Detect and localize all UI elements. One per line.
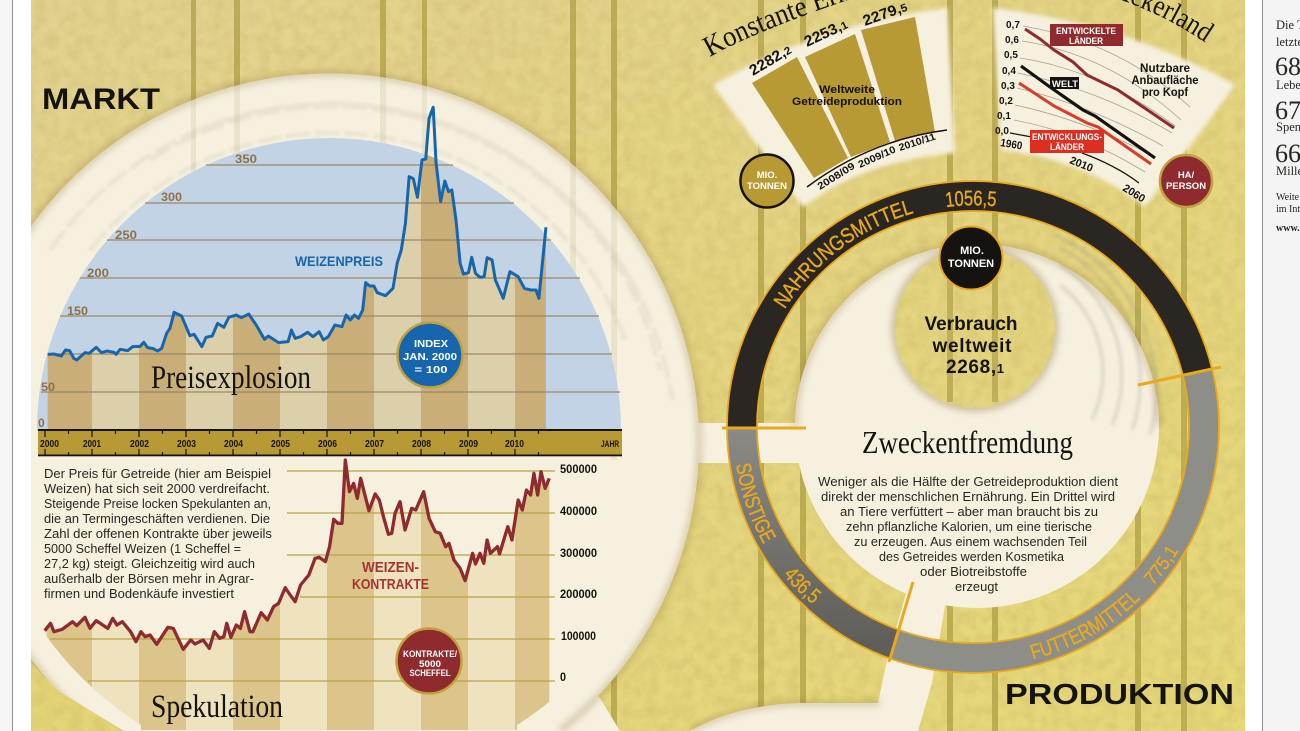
timeline axis: 2001 — [83, 439, 101, 450]
bar axis labels: 2008/09 — [816, 161, 858, 193]
timeline axis: 2004 — [224, 439, 243, 450]
text block: market description: Der Preis für Getreide (hier am Beispiel — [44, 467, 271, 481]
badge: million tonnes gold — [740, 154, 794, 208]
y labels: 0,1 — [997, 111, 1011, 122]
badge: million tonnes gold: TONNEN — [747, 181, 787, 192]
x labels: 2060 — [1120, 182, 1147, 205]
price axis labels: 200 — [87, 266, 109, 280]
badge: hectare per person: PERSON — [1166, 181, 1206, 192]
badge: million tonnes black — [940, 226, 1002, 290]
badge: index: JAN. 2000 — [403, 351, 457, 363]
timeline axis: 2006 — [318, 439, 337, 450]
badge: million tonnes black: TONNEN — [948, 258, 994, 270]
price grid lines — [41, 165, 620, 392]
faint stripes inside circle — [191, 60, 617, 460]
text block: market description: Steigende Preise locken Spekulanten an, — [44, 497, 271, 511]
badge: contracts: SCHEFFEL — [410, 668, 451, 678]
bars — [752, 17, 935, 178]
timeline axis: 2002 — [130, 439, 149, 450]
x labels: 2010 — [1068, 155, 1095, 175]
label: developed countries: LÄNDER — [1069, 36, 1103, 46]
price axis labels: 50 — [41, 380, 55, 394]
chart: grain production bars — [746, 0, 947, 193]
timeline axis: 2007 — [365, 439, 384, 450]
developed countries line — [1025, 29, 1174, 128]
text block: use of grain: an Tiere verfüttert – aber man braucht bis zu — [840, 505, 1098, 519]
sidebar text: Weite — [1276, 192, 1300, 203]
bar axis labels — [816, 132, 937, 193]
timeline axis: 2005 — [271, 439, 290, 450]
text: global consumption: Verbrauch — [924, 314, 1018, 335]
grid curves — [1014, 26, 1190, 172]
contract axis labels: 100000 — [561, 629, 596, 643]
price axis labels: 350 — [235, 152, 257, 166]
price axis labels — [38, 152, 257, 430]
chart: arable land per person — [995, 20, 1198, 205]
timeline axis: 2009 — [459, 439, 478, 450]
badge: million tonnes gold: MIO. — [757, 170, 777, 181]
title: Spekulation: Spekulation — [151, 689, 283, 725]
contract axis labels: 400000 — [560, 504, 597, 518]
heading: Produktion: PRODUKTION — [1005, 679, 1234, 711]
axis line — [1010, 133, 1139, 183]
heading: Markt: MARKT — [42, 83, 160, 116]
badge: index: = 100 — [414, 364, 448, 376]
label: world: WELT — [1052, 79, 1078, 90]
y labels: 0,5 — [1004, 50, 1018, 61]
text block: use of grain: des Getreides werden Kosmetika — [879, 550, 1064, 564]
ring labels: NAHRUNGSMITTEL — [773, 200, 914, 308]
world line — [1021, 66, 1155, 158]
price axis labels: 0 — [38, 416, 45, 430]
title: Preisexplosion: Preisexplosion — [151, 360, 311, 396]
label: developing countries — [1030, 130, 1104, 153]
text block: use of grain: direkt der menschlichen Ernährung. Ein Drittel wird — [821, 490, 1115, 504]
contract grid lines — [50, 471, 555, 681]
title: Zweckentfremdung: Zweckentfremdung — [862, 424, 1073, 460]
bar values: 2282,2 — [746, 41, 794, 79]
y labels: 0,0 — [995, 126, 1009, 137]
badge: hectare per person: HA/ — [1178, 170, 1195, 181]
badge: index — [398, 322, 462, 388]
text block: market description: firmen und Bodenkäufe investiert — [44, 587, 235, 601]
label: Weizenkontrakte — [352, 559, 429, 593]
text block: market description: Zahl der offenen Kontrakte über jeweils — [44, 527, 272, 541]
text block: use of grain: zu erzeugen. Aus einem wachsenden Teil — [854, 535, 1087, 549]
bar axis labels: 2009/10 — [857, 144, 898, 171]
y labels — [995, 20, 1020, 137]
contract axis labels: 500000 — [560, 462, 597, 476]
label: developing countries: ENTWICKLUNGS- — [1032, 132, 1102, 142]
label: developed countries — [1050, 24, 1123, 46]
timeline axis: 2008 — [412, 439, 431, 450]
bottom-left gold corner — [31, 663, 124, 731]
badge: contracts — [396, 628, 462, 694]
ring segment: other — [742, 427, 895, 644]
text block: market description: 27,2 kg) steigt. Gleichzeitig wird auch — [44, 557, 255, 571]
contract axis labels — [560, 462, 597, 684]
chart: wheat price — [37, 80, 621, 430]
price line — [48, 107, 546, 360]
contract area stripes — [40, 456, 550, 731]
ring labels: FUTTERMITTEL — [1030, 592, 1140, 660]
ring labels — [736, 190, 1179, 660]
ring dividers — [722, 367, 1221, 662]
bar values — [746, 0, 910, 79]
text: global consumption: 2268,1 — [946, 357, 1004, 378]
label: Weizenpreis: WEIZENPREIS — [295, 253, 383, 269]
bar chart caption — [792, 84, 902, 108]
text block: market description: 5000 Scheffel Weizen (1 Scheffel = — [44, 542, 241, 556]
contract axis labels: 200000 — [560, 587, 597, 601]
text block: use of grain: oder Biotreibstoffe — [920, 565, 1027, 579]
badge: hectare per person — [1160, 155, 1212, 207]
inner gold circle — [891, 244, 1059, 412]
sidebar text: im Int — [1276, 204, 1300, 215]
contract line — [45, 460, 549, 649]
bar chart caption: Getreideproduktion — [792, 96, 902, 108]
text block: market description: die an Termingeschäften verdienen. Die — [44, 512, 270, 526]
text block: use of grain: zehn pflanzliche Kalorien, um eine tierische — [846, 520, 1092, 534]
ring segment: food — [742, 196, 1197, 427]
price area stripes — [48, 155, 546, 429]
bar axis labels: 2010/11 — [898, 132, 937, 154]
y labels: 0,2 — [999, 96, 1013, 107]
sidebar text — [1275, 18, 1300, 234]
timeline axis: 2010 — [505, 439, 524, 450]
text block: market description: außerhalb der Börsen mehr in Agrar- — [44, 572, 254, 586]
ring labels: 436,5 — [786, 569, 822, 603]
text: global consumption — [924, 314, 1018, 378]
timeline axis: 2000 — [40, 439, 59, 450]
text block: market description — [44, 467, 272, 601]
bar chart caption: Weltweite — [819, 84, 875, 96]
text block: use of grain: erzeugt — [955, 580, 999, 594]
badge: index: INDEX — [414, 338, 448, 350]
y labels: 0,3 — [1001, 81, 1015, 92]
badge: contracts: 5000 — [419, 659, 441, 669]
badge: contracts: KONTRAKTE/ — [403, 649, 457, 659]
text block: use of grain: Weniger als die Hälfte der Getreideproduktion dient — [818, 475, 1119, 489]
ring labels: SONSTIGE — [736, 464, 776, 544]
x labels — [1000, 137, 1147, 205]
text: global consumption: weltweit — [932, 336, 1012, 357]
text block: market description: Weizen) hat sich seit 2000 verdreifacht. — [44, 482, 270, 496]
timeline axis: JAHR — [601, 439, 619, 449]
ring segment: feed — [895, 372, 1204, 658]
y labels: 0,6 — [1005, 35, 1019, 46]
contract axis labels: 0 — [560, 670, 566, 684]
chart caption: Nutzbare — [1140, 63, 1190, 75]
ring labels: 1056,5 — [946, 190, 996, 208]
price axis labels: 300 — [161, 190, 182, 204]
bar values: 2279,5 — [861, 0, 910, 30]
text block: use of grain — [818, 475, 1119, 594]
y labels: 0,4 — [1002, 66, 1016, 77]
ring labels: 775,1 — [1143, 546, 1179, 584]
label: developed countries: ENTWICKELTE — [1056, 26, 1116, 36]
price axis labels: 250 — [115, 228, 137, 242]
chart: consumption ring — [722, 180, 1222, 674]
label: developing countries: LÄNDER — [1050, 142, 1084, 152]
bar values: 2253,1 — [802, 16, 850, 51]
x labels: 1960 — [1000, 137, 1023, 152]
chart caption — [1132, 63, 1198, 99]
timeline axis: 2003 — [177, 439, 196, 450]
chart caption: pro Kopf — [1142, 87, 1188, 99]
sidebar text: www. — [1276, 223, 1300, 234]
chart: wheat contracts — [40, 456, 597, 731]
developing countries line — [1019, 83, 1151, 164]
contract axis labels: 300000 — [560, 546, 597, 560]
badge: million tonnes black: MIO. — [960, 245, 984, 257]
chart caption: Anbaufläche — [1132, 75, 1198, 87]
label: Weizenkontrakte: KONTRAKTE — [352, 576, 429, 593]
timeline axis — [38, 429, 622, 456]
price axis labels: 150 — [67, 304, 88, 318]
label: Weizenkontrakte: WEIZEN- — [362, 559, 419, 576]
y labels: 0,7 — [1006, 20, 1020, 31]
